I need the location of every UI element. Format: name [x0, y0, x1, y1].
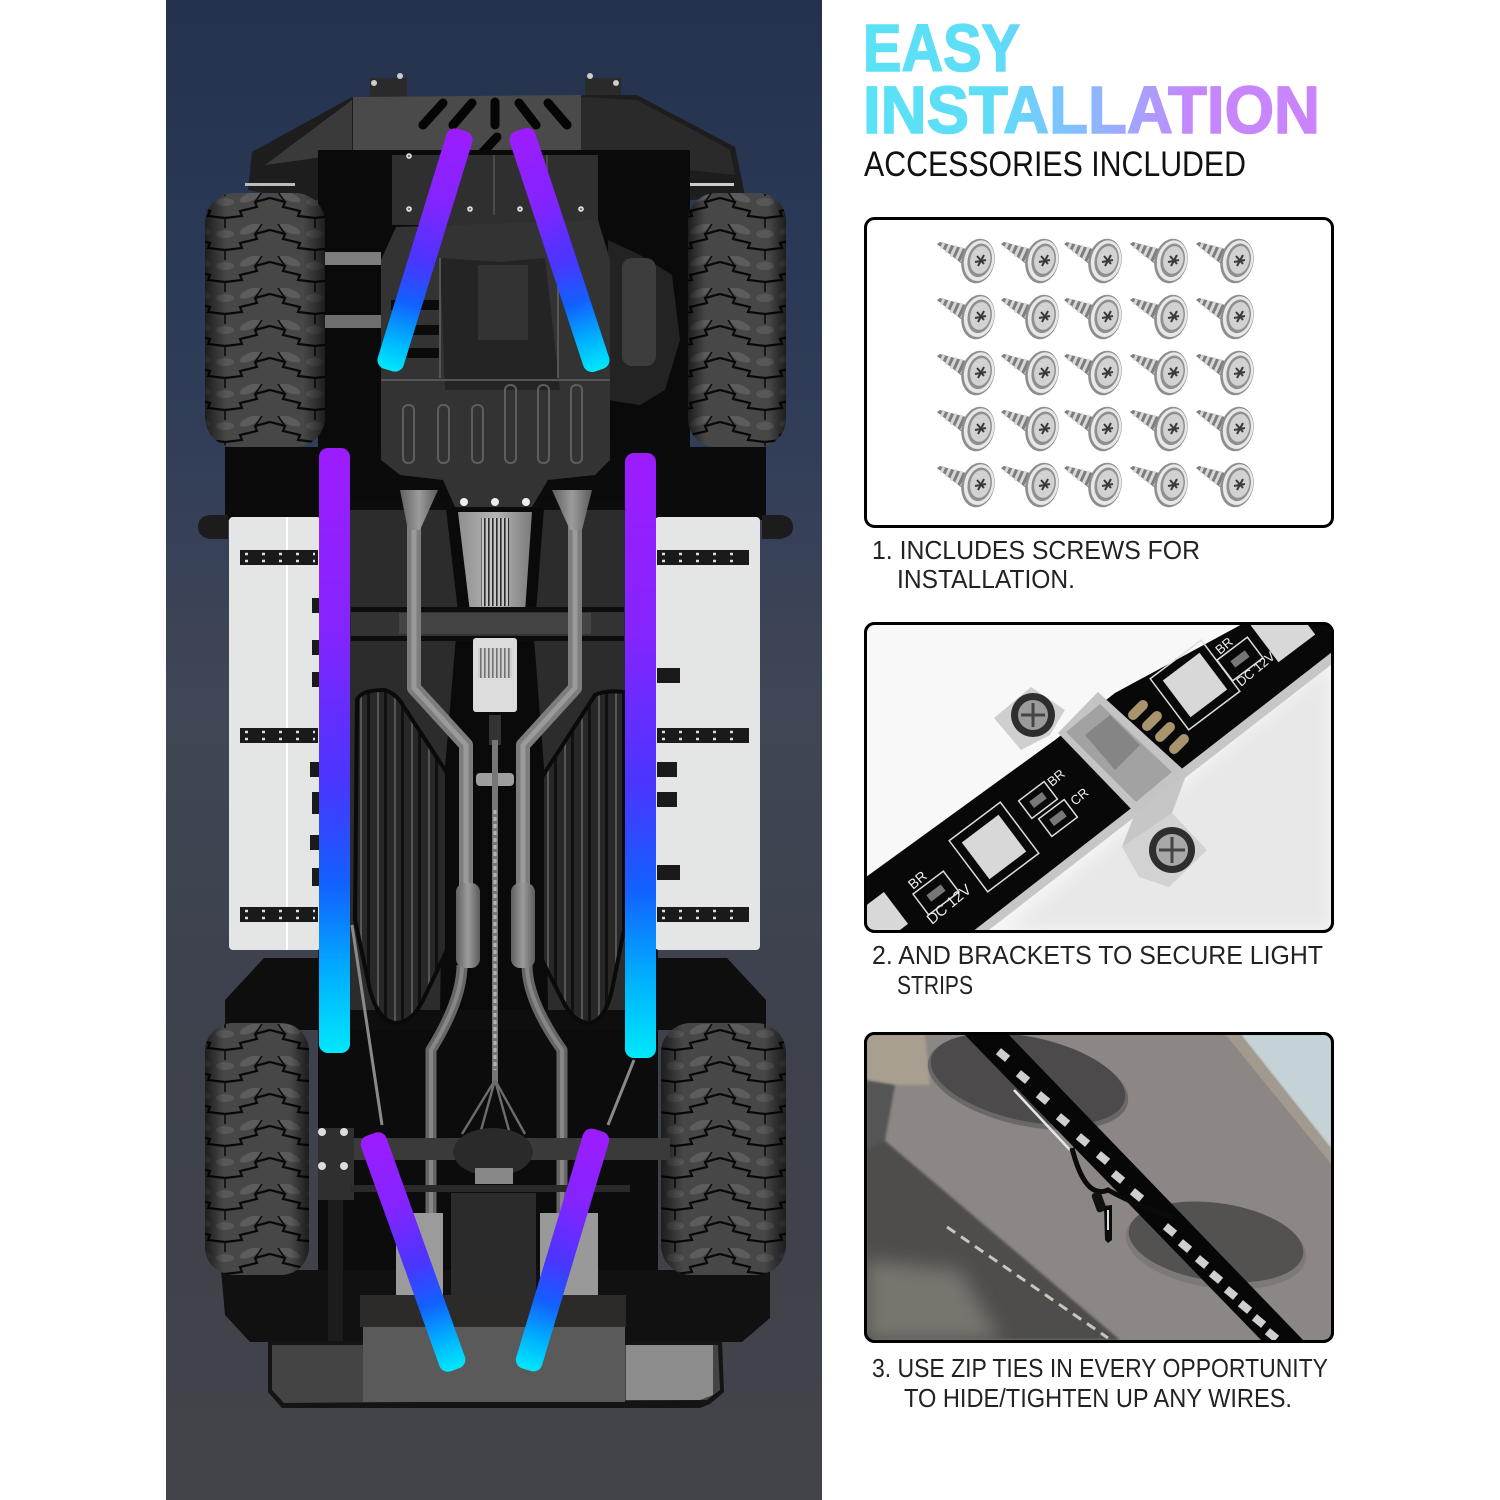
front tyres — [205, 193, 786, 447]
rear tyres — [205, 1023, 786, 1275]
caption 3: 3. USE ZIP TIES IN EVERY OPPORTUNITY — [872, 1353, 1328, 1383]
pcb markings: BR — [1212, 634, 1236, 657]
dashed seam — [947, 1227, 1108, 1338]
caption 1 — [872, 535, 1200, 594]
catalytic funnels — [400, 490, 592, 530]
icon: screws grid — [937, 236, 1258, 510]
rear bumper — [268, 1327, 724, 1408]
silver heat shield and grille — [351, 512, 624, 745]
subtitle: ACCESSORIES INCLUDED — [864, 145, 1246, 184]
white running boards — [198, 515, 793, 950]
pcb markings — [905, 634, 1278, 928]
gold pads — [1128, 700, 1189, 754]
light strip — [867, 625, 1331, 930]
pcb markings: BR — [1044, 766, 1068, 789]
illustration: truck underside — [198, 73, 793, 1408]
plastic bracket — [994, 687, 1207, 887]
caption 1: 1. INCLUDES SCREWS FOR — [872, 535, 1200, 565]
strip: rear right — [514, 1126, 611, 1374]
panel: zip tie photo — [866, 1017, 1332, 1342]
strip: front left — [375, 126, 475, 374]
light strips — [319, 126, 656, 1374]
pcb markings: DC 12V — [1233, 648, 1278, 689]
strip: front right — [507, 126, 612, 374]
floor pans — [350, 508, 625, 1023]
upper skid plate — [392, 153, 598, 225]
pcb markings: BR — [905, 868, 930, 892]
led chips — [852, 598, 1315, 948]
heading line: easy: EASY — [863, 11, 1020, 86]
panel: screws photo — [866, 218, 1332, 526]
rubber pads — [919, 1017, 1312, 1300]
panel: bracket photo — [864, 622, 1334, 933]
strip: long right — [625, 453, 656, 1058]
caption 2 — [872, 940, 1323, 1000]
caption 3: TO HIDE/TIGHTEN UP ANY WIRES. — [904, 1383, 1292, 1413]
strip: rear left — [358, 1130, 468, 1374]
black chassis body — [221, 150, 770, 1360]
pcb markings: CR — [1067, 785, 1091, 808]
caption 2: 2. AND BRACKETS TO SECURE LIGHT — [872, 940, 1323, 970]
rear axle and tanks — [318, 1128, 670, 1360]
bracket screws — [1011, 693, 1195, 873]
caption 3 — [872, 1353, 1328, 1413]
heading line: installation: INSTALLATION — [863, 73, 1320, 148]
main skid plate — [381, 220, 610, 507]
pcb markings: DC 12V — [924, 881, 975, 928]
panel: dark blue background — [166, 0, 822, 1500]
zip tie — [1070, 1148, 1128, 1243]
title: easy installation — [863, 11, 1320, 148]
black led strip — [964, 1034, 1304, 1341]
strip: long left — [319, 448, 350, 1053]
exhaust pipes — [352, 510, 634, 1215]
caption 2: STRIPS — [897, 970, 973, 1000]
front bumper and wings — [245, 73, 745, 200]
caption 1: INSTALLATION. — [897, 564, 1075, 594]
